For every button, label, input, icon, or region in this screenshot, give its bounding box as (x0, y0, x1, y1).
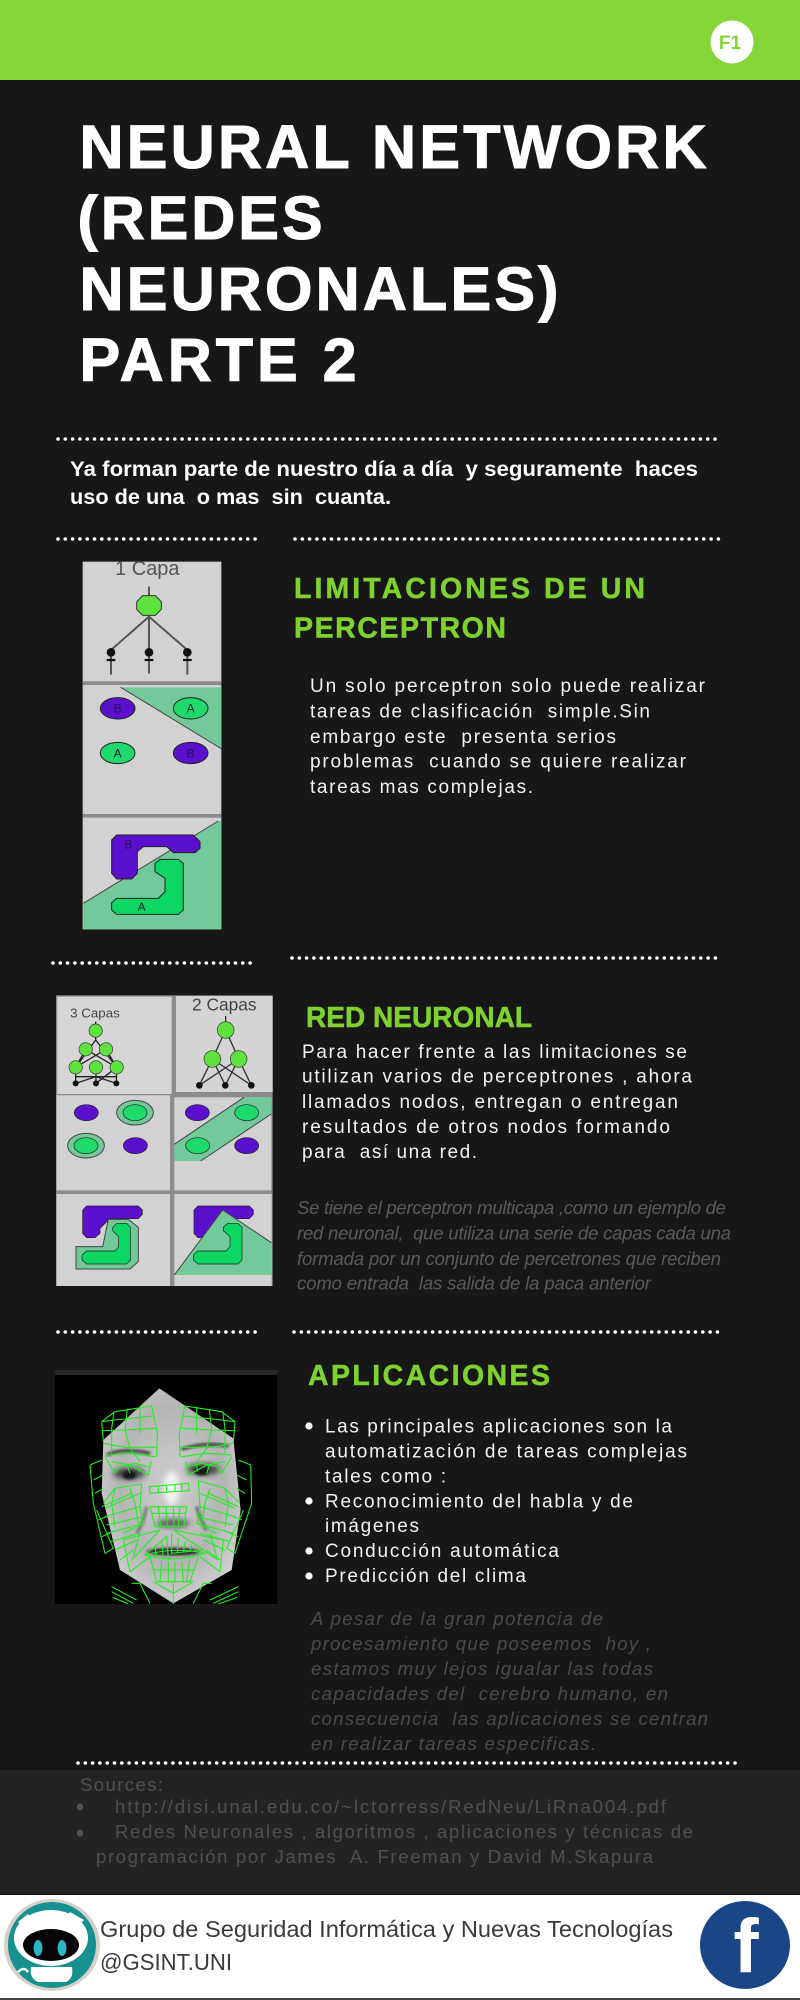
label: 3 Capas diagram (69, 1005, 123, 1086)
image: face mesh recognition (55, 1370, 277, 1604)
section heading: red neuronal: RED NEURONAL (306, 1002, 532, 1034)
paragraph: limitaciones: embargo este presenta serios (310, 727, 616, 748)
italic note: limits: capacidades del cerebro humano, en (311, 1683, 668, 1704)
paragraph: limitaciones (310, 676, 706, 798)
intro text (70, 458, 698, 509)
mesh: nose and mouth (145, 1483, 205, 1604)
paragraph: limitaciones: Un solo perceptron solo puede realizar (310, 676, 706, 697)
header band (0, 0, 800, 80)
panel: interlocked regions with one line (83, 821, 221, 929)
panel: XOR two layers (174, 1097, 271, 1161)
badge: F1 (710, 20, 754, 64)
text: sources list: Redes Neuronales , algoritmos , aplicaciones y técnicas de (115, 1821, 693, 1842)
italic note: perceptron multicapa: formada por un conjunto de percetrones que reciben (297, 1248, 721, 1269)
intro text: Ya forman parte de nuestro día a día y seguramente haces (70, 458, 698, 481)
paragraph: red neuronal: llamados nodos, entregan o entregan (302, 1092, 678, 1113)
badge: F1: F1 (719, 33, 742, 54)
face (102, 1388, 241, 1603)
panel: XOR three layers (68, 1100, 153, 1158)
intro text: uso de una o mas sin cuanta. (70, 486, 391, 509)
title: (REDES (78, 184, 322, 252)
italic note: limits: estamos muy lejos igualar las todas (311, 1658, 653, 1679)
paragraph: limitaciones: problemas cuando se quiere realizar (310, 752, 687, 772)
section heading: limitaciones: PERCEPTRON (294, 612, 506, 644)
icon: facebook: f (733, 1904, 759, 1989)
section heading: limitaciones (294, 573, 645, 644)
italic note: limits (310, 1608, 708, 1754)
section heading: aplicaciones: APLICACIONES (308, 1360, 550, 1392)
panel: interlocked three layers (76, 1206, 142, 1269)
bullet list: aplicaciones: Conducción automática (325, 1541, 559, 1562)
panel: XOR points with one line: A (114, 746, 122, 760)
paragraph: red neuronal: para así una red. (302, 1142, 477, 1163)
italic note: perceptron multicapa (297, 1197, 731, 1294)
paragraph: limitaciones: tareas de clasificación simple.Sin (310, 702, 650, 722)
text: sources list: http://disi.unal.edu.co/~lctorress/RedNeu/LiRna004.pdf (115, 1796, 667, 1817)
text: group name (100, 1916, 673, 1975)
text: sources list: programación por James A. Freeman y David M.Skapura (96, 1846, 654, 1867)
bullet list: aplicaciones: Reconocimiento del habla y de (325, 1492, 633, 1513)
image: single layer perceptron (83, 558, 221, 929)
diagram: one node with three inputs (107, 587, 192, 675)
panel: sources (0, 1770, 800, 1894)
bullet list: aplicaciones (305, 1417, 687, 1587)
panel: interlocked regions with one line: B (124, 837, 132, 851)
paragraph: red neuronal: Para hacer frente a las limitaciones se (302, 1042, 687, 1063)
paragraph: red neuronal: utilizan varios de perceptrones , ahora (302, 1066, 692, 1088)
image: two and three layer networks (56, 995, 273, 1286)
paragraph: red neuronal: resultados de otros nodos formando (302, 1117, 670, 1138)
panel: XOR points with one line: B (187, 746, 195, 760)
bullet list: aplicaciones: Predicción del clima (325, 1566, 526, 1587)
title (78, 113, 706, 394)
bullet list: aplicaciones: imágenes (325, 1516, 419, 1537)
text: group name: Grupo de Seguridad Informática y Nuevas Tecnologías (100, 1916, 673, 1942)
footer band (0, 1895, 800, 2000)
paragraph: red neuronal (302, 1042, 692, 1163)
text: sources list (77, 1774, 693, 1867)
bullet list: aplicaciones: Las principales aplicaciones son la (325, 1417, 672, 1438)
bullet list: aplicaciones: automatización de tareas complejas (325, 1442, 687, 1463)
label: 2 Capas diagram (192, 995, 257, 1089)
italic note: limits: A pesar de la gran potencia de (310, 1608, 603, 1629)
label: 3 Capas diagram: 3 Capas (70, 1005, 120, 1020)
italic note: limits: en realizar tareas especificas. (311, 1733, 596, 1754)
title: NEURONALES) (80, 255, 558, 323)
text: group name: @GSINT.UNI (100, 1949, 232, 1975)
mesh: right side (173, 1406, 252, 1604)
panel: XOR points with one line (100, 687, 221, 764)
text: sources list: Sources: (80, 1774, 163, 1795)
title: PARTE 2 (80, 326, 356, 394)
bullet list: aplicaciones: tales como : (325, 1467, 446, 1488)
label: 2 Capas diagram: 2 Capas (192, 995, 257, 1015)
section heading: limitaciones: LIMITACIONES DE UN (294, 573, 645, 605)
italic note: limits: procesamiento que poseemos hoy , (310, 1633, 651, 1654)
icon: robot logo (4, 1899, 100, 1991)
icon: facebook (700, 1901, 790, 1989)
italic note: perceptron multicapa: Se tiene el perceptron multicapa ,como un ejemplo de (297, 1197, 726, 1218)
italic note: perceptron multicapa: como entrada las salida de la paca anterior (297, 1272, 652, 1294)
italic note: perceptron multicapa: red neuronal, que utiliza una serie de capas cada una (297, 1222, 731, 1244)
title: NEURAL NETWORK (80, 113, 706, 181)
paragraph: limitaciones: tareas mas complejas. (310, 777, 533, 798)
italic note: limits: consecuencia las aplicaciones se centran (311, 1708, 708, 1729)
panel: interlocked two layers (174, 1206, 271, 1275)
label: 1 Capa: 1 Capa (115, 558, 180, 580)
panel: XOR points with one line: A (187, 702, 195, 716)
panel: interlocked regions with one line: A (138, 900, 146, 914)
panel: XOR points with one line: B (114, 702, 122, 716)
mesh: left side (90, 1406, 160, 1604)
